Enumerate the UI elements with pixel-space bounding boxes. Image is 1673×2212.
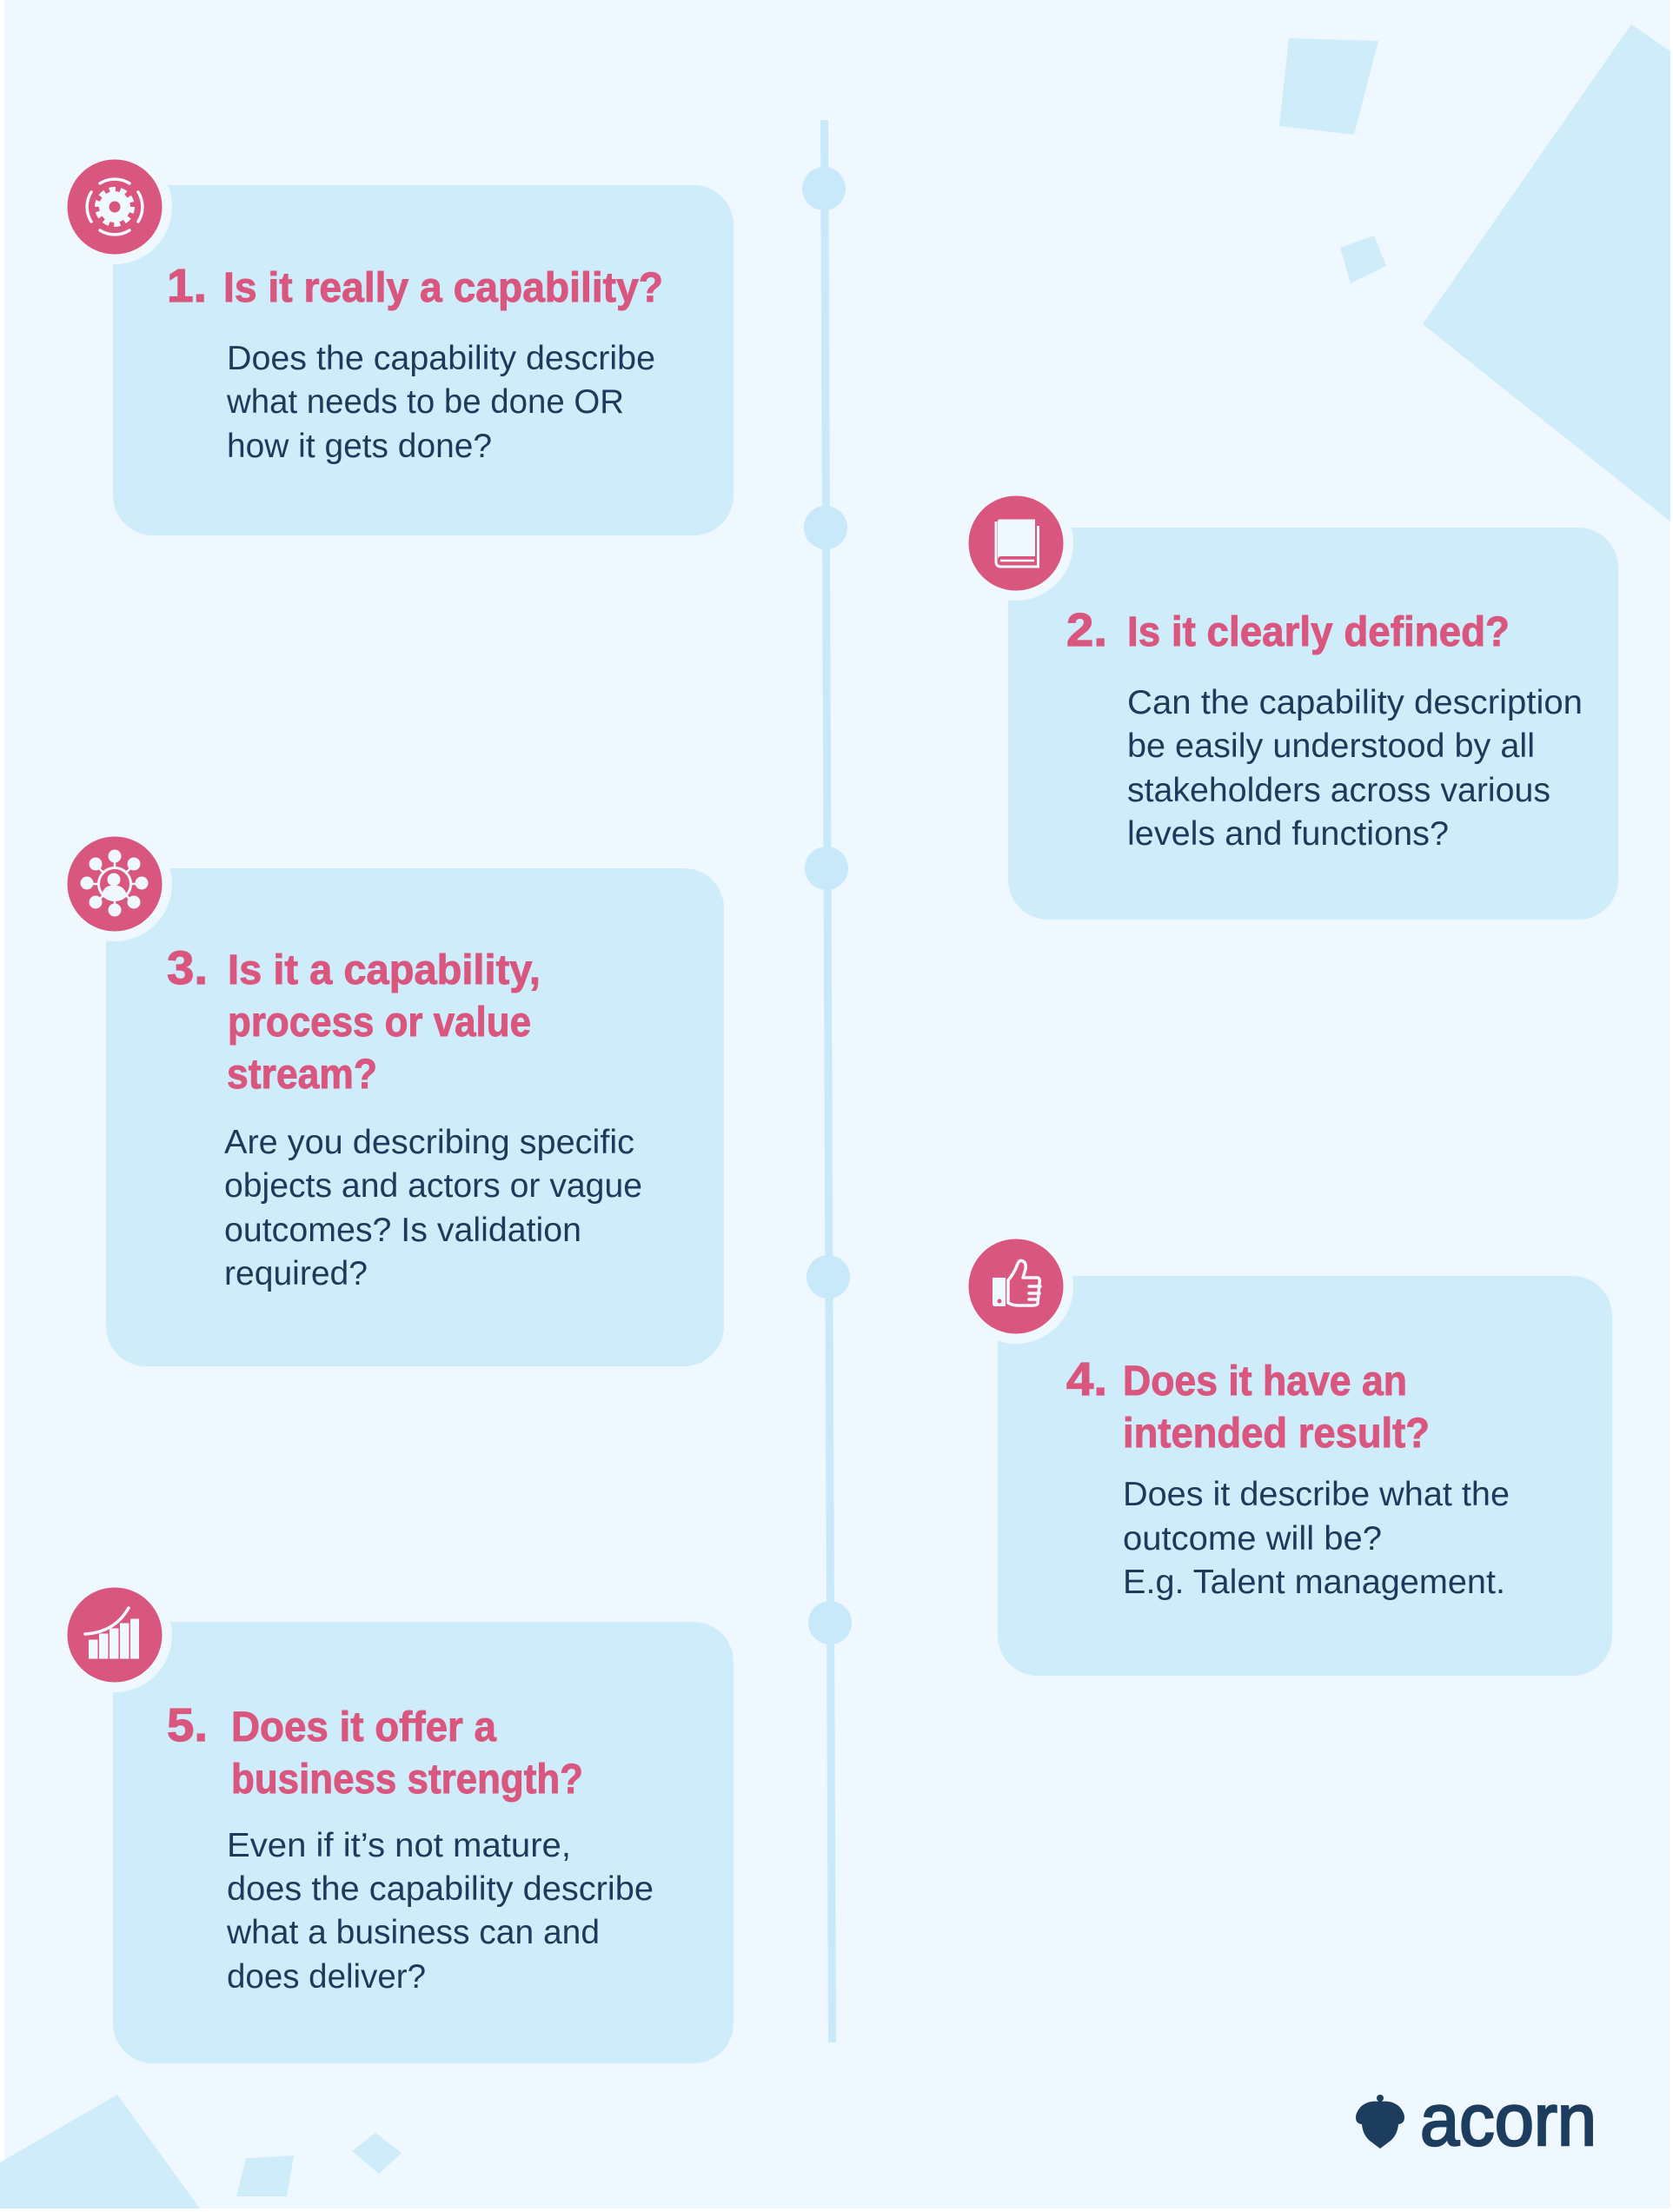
body text 3 — [224, 1124, 642, 1292]
heading 4: Does it have an — [1123, 1358, 1407, 1405]
card 1 background — [113, 185, 734, 535]
body text 2: be easily understood by all — [1127, 727, 1535, 765]
heading 3: process or value — [228, 1000, 531, 1046]
heading 1: Is it really a capability? — [223, 265, 663, 311]
body text 4 — [1123, 1476, 1510, 1601]
body text 4: E.g. Talent management. — [1123, 1564, 1505, 1601]
icon 1: gear with circular arrows — [57, 149, 172, 264]
body text 2 — [1127, 684, 1583, 853]
panel 4: Does it have an intended result? — [959, 1229, 1612, 1676]
body text 5 — [226, 1827, 654, 1996]
body text 5: Even if it’s not mature, — [227, 1827, 571, 1864]
heading 4: intended result? — [1123, 1411, 1430, 1457]
heading 3: stream? — [227, 1052, 377, 1098]
panel 5: Does it offer a business strength? — [57, 1578, 734, 2063]
icon 3: connected people network — [57, 827, 172, 941]
icon: acorn nut — [1356, 2095, 1404, 2149]
number 1: 1. — [167, 260, 207, 312]
icon 4: thumbs up — [959, 1229, 1073, 1344]
body text 1: what needs to be done OR — [226, 383, 624, 421]
body text 1 — [226, 340, 655, 465]
icon 2: book — [959, 486, 1073, 601]
heading 5: Does it offer a — [231, 1704, 496, 1750]
number 5: 5. — [167, 1699, 208, 1751]
panel 1: Is it really a capability? — [57, 149, 734, 535]
card 3 background — [106, 868, 724, 1366]
icon 5: growth bar chart — [57, 1578, 172, 1692]
body text 2: levels and functions? — [1127, 815, 1449, 853]
card 4 background — [998, 1276, 1612, 1676]
body text 1: Does the capability describe — [227, 340, 655, 377]
number 2: 2. — [1066, 604, 1107, 656]
decorative shapes: bottom left — [0, 2095, 402, 2209]
decorative shapes: top right — [1279, 24, 1670, 521]
body text 5: does deliver? — [227, 1958, 426, 1996]
heading 5 — [231, 1704, 583, 1803]
body text 4: Does it describe what the — [1123, 1476, 1510, 1513]
panel 2: Is it clearly defined? — [959, 486, 1618, 920]
number 4: 4. — [1066, 1353, 1107, 1405]
card 2 background — [1008, 528, 1618, 920]
number 3: 3. — [167, 942, 208, 994]
heading 2: Is it clearly defined? — [1127, 609, 1510, 655]
wordmark: acorn — [1420, 2079, 1597, 2161]
heading 3: Is it a capability, — [228, 947, 541, 993]
logo: acorn — [1356, 2079, 1597, 2161]
panel 3: Is it a capability, process or value stream? — [57, 827, 724, 1366]
heading 3 — [227, 947, 541, 1098]
body text 3: outcomes? Is validation — [224, 1212, 581, 1249]
body text 1: how it gets done? — [227, 428, 492, 465]
body text 4: outcome will be? — [1123, 1520, 1382, 1558]
heading 4 — [1123, 1358, 1430, 1457]
card 5 background — [113, 1622, 734, 2063]
body text 5: what a business can and — [226, 1914, 600, 1951]
timeline: vertical line with five nodes — [802, 120, 852, 2043]
body text 3: objects and actors or vague — [224, 1167, 642, 1205]
body text 2: Can the capability description — [1127, 684, 1583, 721]
body text 3: Are you describing specific — [224, 1124, 634, 1161]
body text 3: required? — [224, 1255, 368, 1292]
heading 5: business strength? — [231, 1757, 583, 1803]
body text 2: stakeholders across various — [1127, 772, 1550, 809]
body text 5: does the capability describe — [227, 1870, 654, 1908]
